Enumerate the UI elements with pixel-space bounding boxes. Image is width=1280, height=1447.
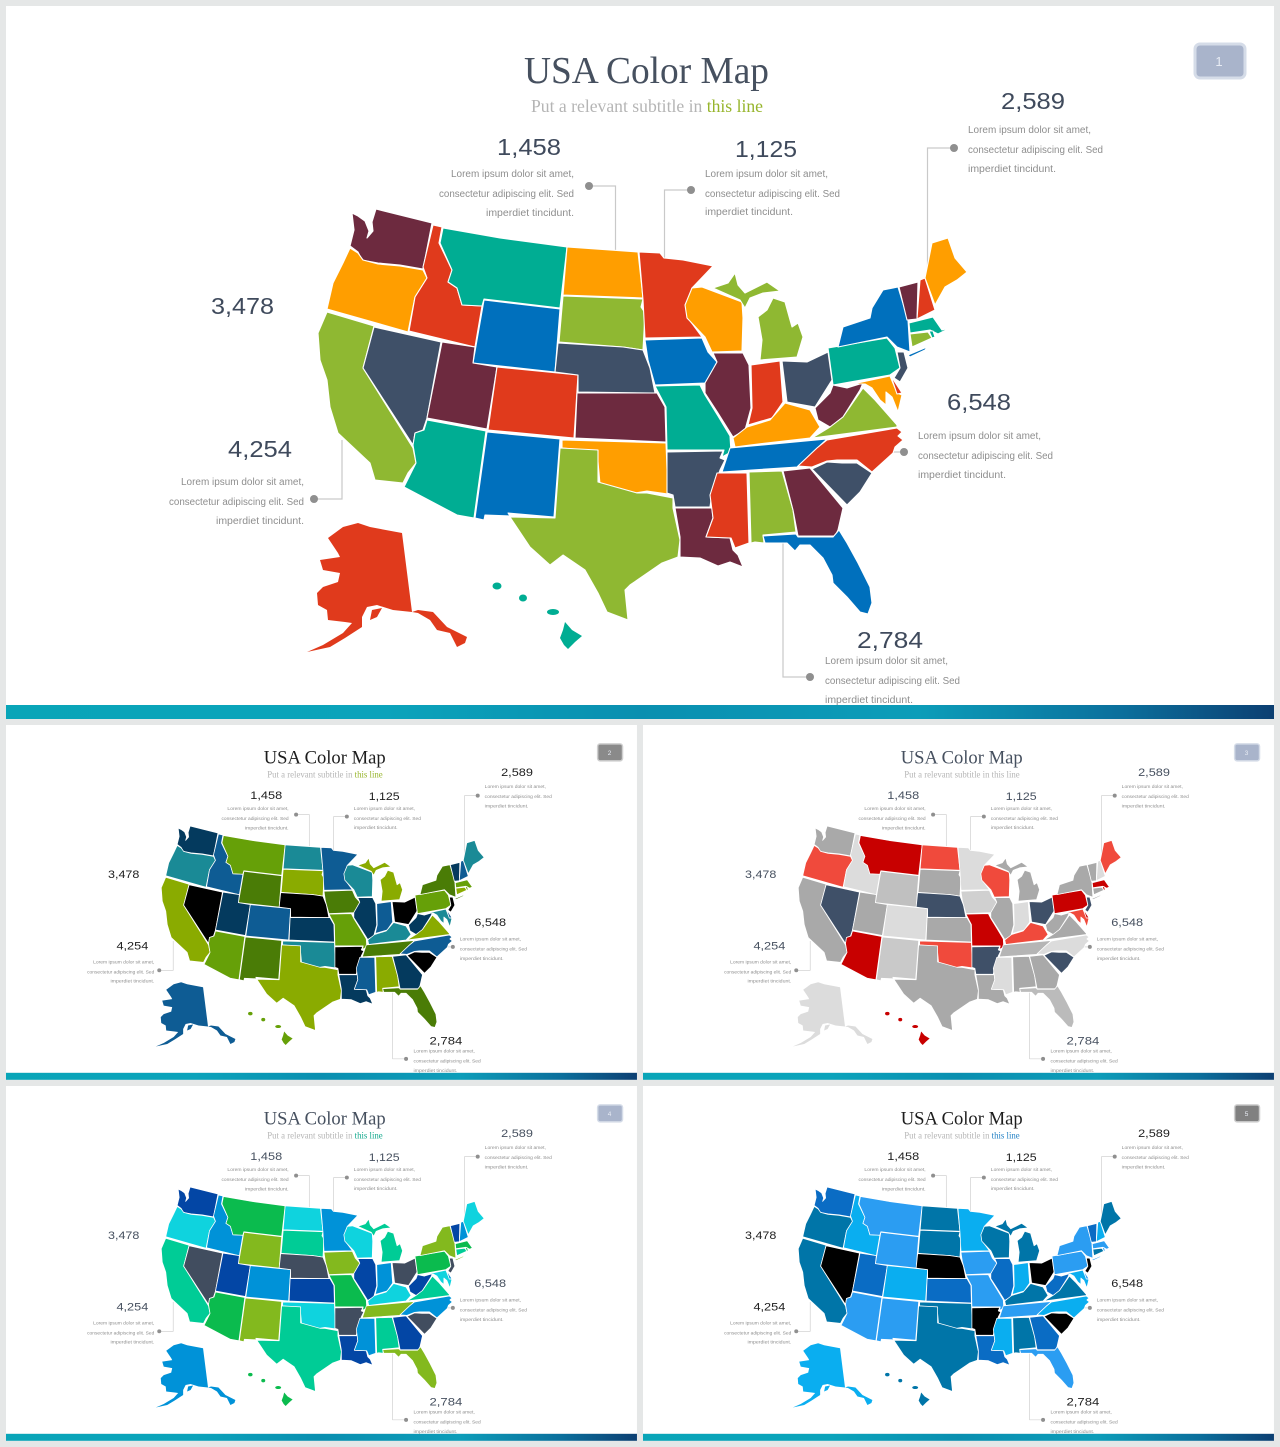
stat: 6,548: 6,548 (947, 389, 1011, 415)
stats and captions: consectetur adipiscing elit. Sed (1051, 1058, 1118, 1064)
stats and captions: imperdiet tincidunt. (747, 1340, 791, 1346)
stats and captions: consectetur adipiscing elit. Sed (485, 1155, 552, 1161)
state: Mississippi (706, 473, 749, 548)
stats and captions (724, 1128, 1189, 1435)
stats and captions: Lorem ipsum dolor sit amet, (730, 959, 791, 965)
stats and captions: 4,254 (116, 1301, 149, 1313)
stats and captions: imperdiet tincidunt. (1051, 1068, 1094, 1074)
page badge: 1 (1215, 54, 1223, 69)
stat: 1,458: 1,458 (497, 134, 561, 160)
stat: 1,125: imperdiet tincidunt. (705, 207, 793, 218)
state: Kansas (575, 393, 666, 442)
panel: slide 4 seafoam and blue (6, 1086, 637, 1441)
panel: slide 3 red and gray: Put a relevant subtitle in this line (904, 770, 1020, 780)
stats and captions (87, 767, 552, 1074)
panel: slide 5 blues (643, 1086, 1274, 1441)
stat: 1,125: Lorem ipsum dolor sit amet, (705, 169, 828, 180)
stats and captions: imperdiet tincidunt. (485, 804, 528, 810)
stats and captions: 3,478 (745, 869, 776, 881)
stat: 4,254: imperdiet tincidunt. (216, 516, 304, 527)
panel: slide 3 red and gray: 3 (1245, 750, 1249, 757)
stats and captions: Lorem ipsum dolor sit amet, (864, 1167, 926, 1173)
stats and captions: Lorem ipsum dolor sit amet, (991, 1167, 1052, 1173)
stats and captions: Lorem ipsum dolor sit amet, (93, 1320, 154, 1326)
stats and captions: consectetur adipiscing elit. Sed (460, 1307, 527, 1313)
state: Hawaii (492, 582, 582, 649)
stats and captions: consectetur adipiscing elit. Sed (87, 1330, 155, 1336)
stats and captions: imperdiet tincidunt. (460, 1317, 504, 1323)
state: Virginia (812, 388, 897, 438)
stats and captions: imperdiet tincidunt. (245, 825, 289, 831)
stat: 4,254 (169, 436, 304, 527)
state: California (318, 312, 416, 483)
stats and captions: Lorem ipsum dolor sit amet, (485, 1145, 546, 1151)
stats and captions: imperdiet tincidunt. (991, 1186, 1035, 1192)
stats and captions: 3,478 (108, 869, 139, 881)
state: Texas (510, 448, 680, 620)
stat: 4,254: Lorem ipsum dolor sit amet, (181, 477, 304, 488)
stat: 1,125 (705, 136, 840, 218)
stats and captions: imperdiet tincidunt. (991, 825, 1035, 831)
stats and captions: 3,478 (108, 1230, 139, 1242)
stats and captions: Lorem ipsum dolor sit amet, (354, 806, 415, 812)
state: Connecticut (910, 332, 932, 347)
panel: slide 4 seafoam and blue: 4 (608, 1111, 612, 1118)
stats and captions: Lorem ipsum dolor sit amet, (864, 806, 926, 812)
panel: slide 2 green and navy (6, 725, 637, 1080)
stat: 6,548 (918, 389, 1053, 481)
page badge (1195, 44, 1245, 78)
state: Minnesota (639, 252, 713, 338)
stats and captions: 6,548 (474, 917, 506, 929)
stat: 2,784: consectetur adipiscing elit. Sed (825, 676, 960, 687)
state: Illinois (705, 353, 751, 437)
stat: 2,784: imperdiet tincidunt. (825, 695, 913, 706)
state: Arkansas (667, 451, 725, 507)
stats and captions: Lorem ipsum dolor sit amet, (354, 1167, 415, 1173)
stats and captions: Lorem ipsum dolor sit amet, (93, 959, 154, 965)
stats and captions: imperdiet tincidunt. (110, 979, 154, 985)
stats and captions: imperdiet tincidunt. (414, 1429, 457, 1435)
state: Missouri (655, 385, 731, 457)
panel: main slide 1 (6, 6, 1274, 719)
stats and captions: consectetur adipiscing elit. Sed (1122, 794, 1189, 800)
stats and captions: 3,478 (745, 1230, 776, 1242)
panel: slide 2 green and navy: USA Color Map (264, 747, 386, 768)
state: Pennsylvania (828, 338, 900, 385)
stats and captions: imperdiet tincidunt. (747, 979, 791, 985)
stats and captions: consectetur adipiscing elit. Sed (460, 946, 527, 952)
stats and captions: consectetur adipiscing elit. Sed (485, 794, 552, 800)
stat: 1,458: Lorem ipsum dolor sit amet, (451, 169, 574, 180)
stats and captions (724, 767, 1189, 1074)
state: West Virginia (815, 383, 863, 427)
stat: 1,458 (439, 134, 574, 219)
stats and captions: 2,784 (1066, 1035, 1100, 1047)
stats and captions: consectetur adipiscing elit. Sed (354, 816, 421, 822)
state: Arizona (404, 420, 486, 518)
stats and captions: consectetur adipiscing elit. Sed (858, 1177, 926, 1183)
state: New Hampshire (917, 278, 935, 319)
stats and captions: Lorem ipsum dolor sit amet, (730, 1320, 791, 1326)
stat: 2,589 (968, 88, 1103, 175)
panel: slide 2 green and navy: Put a relevant subtitle in this line (267, 770, 383, 780)
stats and captions: imperdiet tincidunt. (1051, 1429, 1094, 1435)
stats and captions: 4,254 (753, 940, 786, 952)
stats and captions: 1,125 (369, 1152, 400, 1164)
stat: 6,548: imperdiet tincidunt. (918, 470, 1006, 481)
map: seafoam and blue USA (156, 1187, 484, 1407)
map: blue shades USA (793, 1187, 1121, 1407)
stats and captions: imperdiet tincidunt. (414, 1068, 457, 1074)
state: Indiana (748, 361, 783, 425)
stats and captions: 4,254 (753, 1301, 786, 1313)
stats and captions: consectetur adipiscing elit. Sed (1051, 1419, 1118, 1425)
stat: 4,254: 4,254 (228, 436, 292, 462)
state: Iowa (645, 338, 717, 385)
panel: slide 4 seafoam and blue: USA Color Map (264, 1108, 386, 1129)
stat: 2,589: consectetur adipiscing elit. Sed (968, 145, 1103, 156)
stats and captions: consectetur adipiscing elit. Sed (724, 1330, 792, 1336)
stat: 6,548: Lorem ipsum dolor sit amet, (918, 431, 1041, 442)
state: Montana (440, 228, 567, 308)
stats and captions: imperdiet tincidunt. (1097, 956, 1141, 962)
stats and captions: consectetur adipiscing elit. Sed (87, 969, 155, 975)
stats and captions: consectetur adipiscing elit. Sed (724, 969, 792, 975)
stats and captions: 2,784 (1066, 1396, 1100, 1408)
stats and captions: Lorem ipsum dolor sit amet, (991, 806, 1052, 812)
stats and captions: imperdiet tincidunt. (245, 1186, 289, 1192)
state: Florida (763, 530, 872, 614)
state: Colorado (488, 367, 578, 438)
map: red and gray USA (793, 826, 1121, 1046)
stats and captions: 6,548 (474, 1278, 506, 1290)
stat: 3,478: 3,478 (211, 293, 274, 319)
state: Kentucky (733, 403, 820, 447)
subtitle: Put a relevant subtitle in this line (531, 96, 763, 116)
stats and captions: Lorem ipsum dolor sit amet, (1097, 1297, 1158, 1303)
panel: slide 4 seafoam and blue: Put a relevant subtitle in this line (267, 1131, 383, 1141)
stats and captions: Lorem ipsum dolor sit amet, (227, 806, 289, 812)
stats and captions: 1,125 (1006, 1152, 1037, 1164)
state: North Carolina (798, 428, 903, 472)
state: Tennessee (722, 439, 827, 472)
stats and captions (87, 1128, 552, 1435)
stats and captions: imperdiet tincidunt. (485, 1165, 528, 1171)
stats and captions: 2,589 (501, 767, 533, 779)
stats and captions: consectetur adipiscing elit. Sed (221, 1177, 289, 1183)
state: Alabama (749, 471, 796, 543)
state: New Mexico (475, 432, 560, 520)
stats and captions: 2,784 (429, 1035, 463, 1047)
panel: slide 2 green and navy: 2 (608, 750, 612, 757)
stat: 2,589: imperdiet tincidunt. (968, 164, 1056, 175)
state: Vermont (899, 282, 918, 320)
stats and captions: imperdiet tincidunt. (110, 1340, 154, 1346)
stats and captions: imperdiet tincidunt. (1097, 1317, 1141, 1323)
stats and captions: consectetur adipiscing elit. Sed (221, 816, 289, 822)
stats and captions: 6,548 (1111, 1278, 1143, 1290)
map: multicolor USA (307, 209, 967, 652)
stats and captions: imperdiet tincidunt. (460, 956, 504, 962)
panel: slide 5 blues: Put a relevant subtitle in this line (904, 1131, 1020, 1141)
stats and captions: imperdiet tincidunt. (354, 825, 398, 831)
panel: slide 3 red and gray (643, 725, 1274, 1080)
stats and captions: imperdiet tincidunt. (354, 1186, 398, 1192)
panel: slide 5 blues: 5 (1245, 1111, 1249, 1118)
state: Massachusetts (909, 317, 950, 334)
state: Maine (925, 238, 967, 305)
state: Ohio (782, 352, 832, 407)
stats and captions: Lorem ipsum dolor sit amet, (460, 1297, 521, 1303)
stats and captions: Lorem ipsum dolor sit amet, (414, 1409, 475, 1415)
state: Oregon (327, 248, 427, 332)
state: Nevada (363, 327, 441, 445)
stats and captions: 2,589 (1138, 767, 1170, 779)
stats and captions: consectetur adipiscing elit. Sed (414, 1058, 481, 1064)
footer bar (6, 705, 1274, 719)
stats and captions: Lorem ipsum dolor sit amet, (1051, 1048, 1112, 1054)
stats and captions: 1,125 (369, 791, 400, 803)
state: South Dakota (559, 296, 645, 350)
state: South Carolina (812, 462, 872, 505)
stats and captions: 2,589 (501, 1128, 533, 1140)
stats and captions: Lorem ipsum dolor sit amet, (1051, 1409, 1112, 1415)
stat: 1,458: imperdiet tincidunt. (486, 208, 574, 219)
stats and captions: consectetur adipiscing elit. Sed (1097, 1307, 1164, 1313)
stats and captions: 6,548 (1111, 917, 1143, 929)
state: Maryland (848, 376, 902, 412)
stat: 2,589: Lorem ipsum dolor sit amet, (968, 125, 1091, 136)
stats and captions: consectetur adipiscing elit. Sed (1097, 946, 1164, 952)
stats and captions: consectetur adipiscing elit. Sed (1122, 1155, 1189, 1161)
stat: 2,589: 2,589 (1001, 88, 1065, 114)
state: Utah (427, 342, 497, 429)
stats and captions: imperdiet tincidunt. (882, 1186, 926, 1192)
state: Alaska (307, 523, 467, 652)
stats and captions: consectetur adipiscing elit. Sed (354, 1177, 421, 1183)
stats and captions: Lorem ipsum dolor sit amet, (460, 936, 521, 942)
stats and captions: consectetur adipiscing elit. Sed (414, 1419, 481, 1425)
state: Rhode Island (929, 331, 935, 338)
state: Idaho (409, 225, 482, 347)
stats and captions: 1,458 (250, 1151, 282, 1163)
state: New Jersey (894, 352, 908, 382)
stat: 2,784: 2,784 (857, 627, 923, 653)
stats and captions: imperdiet tincidunt. (882, 825, 926, 831)
stats and captions: consectetur adipiscing elit. Sed (991, 816, 1058, 822)
stats and captions: 1,458 (250, 790, 282, 802)
state: Michigan (713, 273, 803, 360)
state: Wyoming (473, 300, 560, 372)
stat: 1,458: consectetur adipiscing elit. Sed (439, 189, 574, 200)
stats and captions: 2,784 (429, 1396, 463, 1408)
state: Georgia (783, 468, 843, 536)
stat: 1,125: consectetur adipiscing elit. Sed (705, 189, 840, 200)
stats and captions: Lorem ipsum dolor sit amet, (227, 1167, 289, 1173)
stats and captions: Lorem ipsum dolor sit amet, (1097, 936, 1158, 942)
stat: 6,548: consectetur adipiscing elit. Sed (918, 451, 1053, 462)
stat: 1,125: 1,125 (735, 136, 797, 162)
stats and captions: 2,589 (1138, 1128, 1170, 1140)
stats and captions: imperdiet tincidunt. (1122, 1165, 1165, 1171)
state: Washington (350, 209, 432, 269)
stats and captions: consectetur adipiscing elit. Sed (858, 816, 926, 822)
stats and captions: Lorem ipsum dolor sit amet, (414, 1048, 475, 1054)
state: New York (838, 287, 927, 357)
state: Nebraska (555, 343, 655, 393)
stat: 2,784: Lorem ipsum dolor sit amet, (825, 656, 948, 667)
stats and captions: 1,125 (1006, 791, 1037, 803)
title: USA Color Map (524, 50, 769, 92)
stats and captions: 1,458 (887, 790, 919, 802)
stats and captions: Lorem ipsum dolor sit amet, (485, 784, 546, 790)
stats and captions: Lorem ipsum dolor sit amet, (1122, 1145, 1183, 1151)
stats and captions: 4,254 (116, 940, 149, 952)
stat: 2,784 (825, 627, 960, 706)
stats and captions: Lorem ipsum dolor sit amet, (1122, 784, 1183, 790)
map: green and navy USA (156, 826, 484, 1046)
stat: 4,254: consectetur adipiscing elit. Sed (169, 497, 304, 508)
stats and captions: 1,458 (887, 1151, 919, 1163)
panel: slide 3 red and gray: USA Color Map (901, 747, 1023, 768)
state: North Dakota (563, 247, 643, 298)
state: Wisconsin (685, 287, 743, 352)
state: Oklahoma (562, 440, 668, 494)
stats and captions: consectetur adipiscing elit. Sed (991, 1177, 1058, 1183)
stats and captions: imperdiet tincidunt. (1122, 804, 1165, 810)
state: Louisiana (675, 508, 743, 567)
panel: slide 5 blues: USA Color Map (901, 1108, 1023, 1129)
state: Delaware (891, 376, 902, 394)
connector lines (310, 144, 958, 681)
